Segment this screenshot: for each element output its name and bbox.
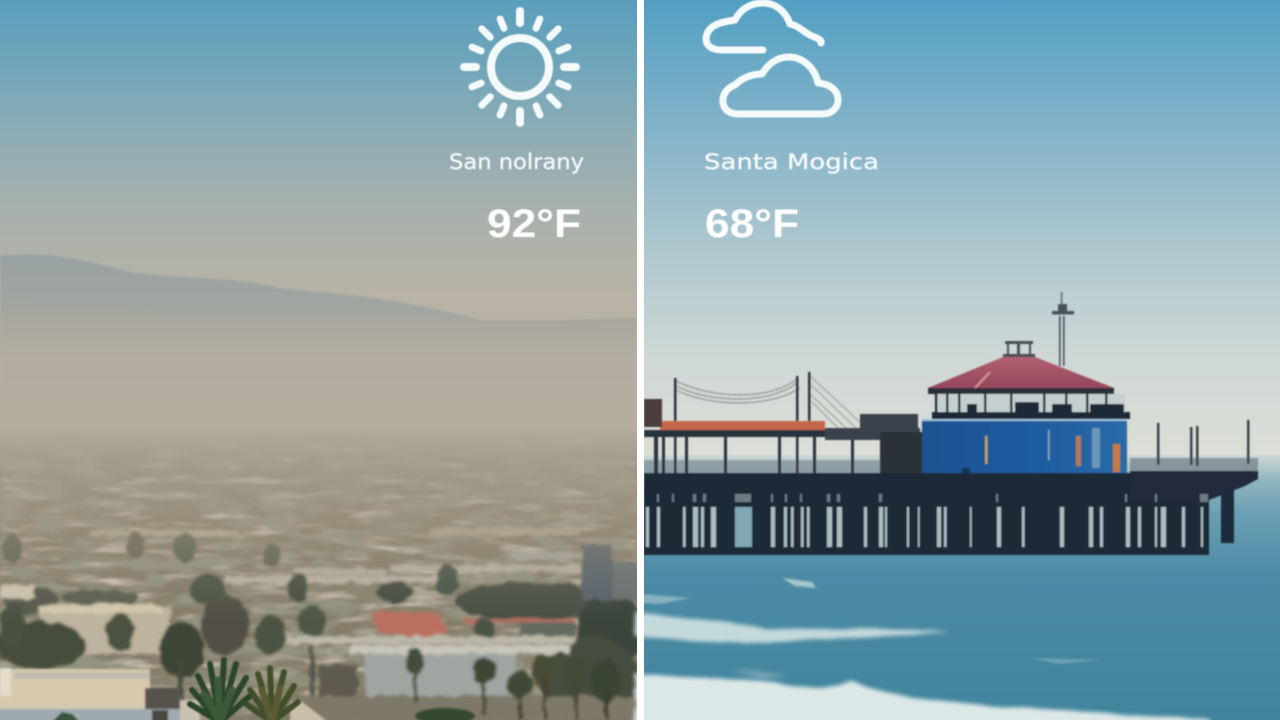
ocean [644, 455, 1280, 720]
mid-distance buildings and trees [2, 528, 642, 720]
outer piling [1221, 490, 1234, 543]
ocean waves [635, 578, 1210, 720]
right lamp posts [1157, 420, 1250, 466]
haze over the city [0, 430, 637, 620]
palm: foreground right [246, 668, 298, 720]
gaps between pilings [646, 507, 1203, 547]
label: left temperature: 92°F [487, 202, 581, 246]
blue drum building [922, 420, 1127, 476]
icon: sun [464, 11, 576, 123]
rear railing [644, 460, 884, 473]
main deck and pilings block [644, 473, 1209, 555]
panel: coastal pier [635, 0, 1280, 720]
label: left city name: San nolrany [449, 150, 584, 174]
dark block beside drum [880, 432, 925, 474]
icon: lower cloud [723, 57, 838, 114]
city rooftop rows [0, 430, 637, 720]
icon: upper cloud [706, 3, 821, 50]
mast [1052, 292, 1074, 366]
city base [0, 430, 637, 720]
observation level [935, 394, 1125, 419]
panel: hazy inland city [0, 0, 642, 720]
cupola [1003, 341, 1035, 358]
hazy mountains [0, 254, 637, 440]
red roof [928, 357, 1114, 392]
deck rivet ticks [657, 494, 1208, 502]
pier [644, 292, 1258, 555]
sky: right [644, 0, 1280, 470]
divider [637, 0, 644, 720]
label: right temperature: 68°F [705, 202, 799, 246]
orange walkway [660, 421, 825, 431]
upper deck posts [654, 372, 854, 474]
city dark tree cover [0, 430, 637, 720]
pier string lights [676, 374, 862, 430]
label: right city name: Santa Mogica [704, 150, 879, 174]
palm: foreground left [190, 660, 250, 720]
foreground rooftops [0, 668, 475, 720]
sky: left [0, 0, 637, 720]
foreground buildings and trees [0, 585, 640, 720]
